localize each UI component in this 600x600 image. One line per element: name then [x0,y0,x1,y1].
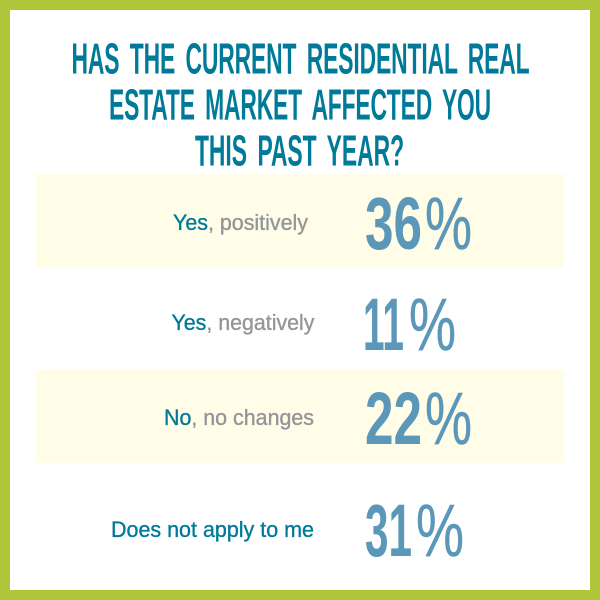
row: does not apply to me [111,489,464,572]
title: ESTATE MARKET AFFECTED YOU [109,81,491,130]
title: HAS THE CURRENT RESIDENTIAL REAL [72,35,530,84]
band [36,370,564,463]
value: 36 [365,182,422,265]
label: Yes, positively [173,210,308,235]
row: yes, negatively [172,283,456,366]
label: Does not apply to me [111,517,314,542]
value: % [416,489,464,572]
row: yes, positively [36,174,564,267]
value: 22 [365,377,422,460]
band [36,174,564,267]
title: THIS PAST YEAR? [195,127,404,176]
row: no, no changes [36,370,564,463]
value: 31 [365,489,412,572]
value: 11 [363,283,404,366]
label: Yes, negatively [172,310,314,335]
value: % [409,283,456,366]
title [72,35,530,176]
value: % [425,377,472,460]
label: No, no changes [164,405,314,430]
value: % [425,182,472,265]
